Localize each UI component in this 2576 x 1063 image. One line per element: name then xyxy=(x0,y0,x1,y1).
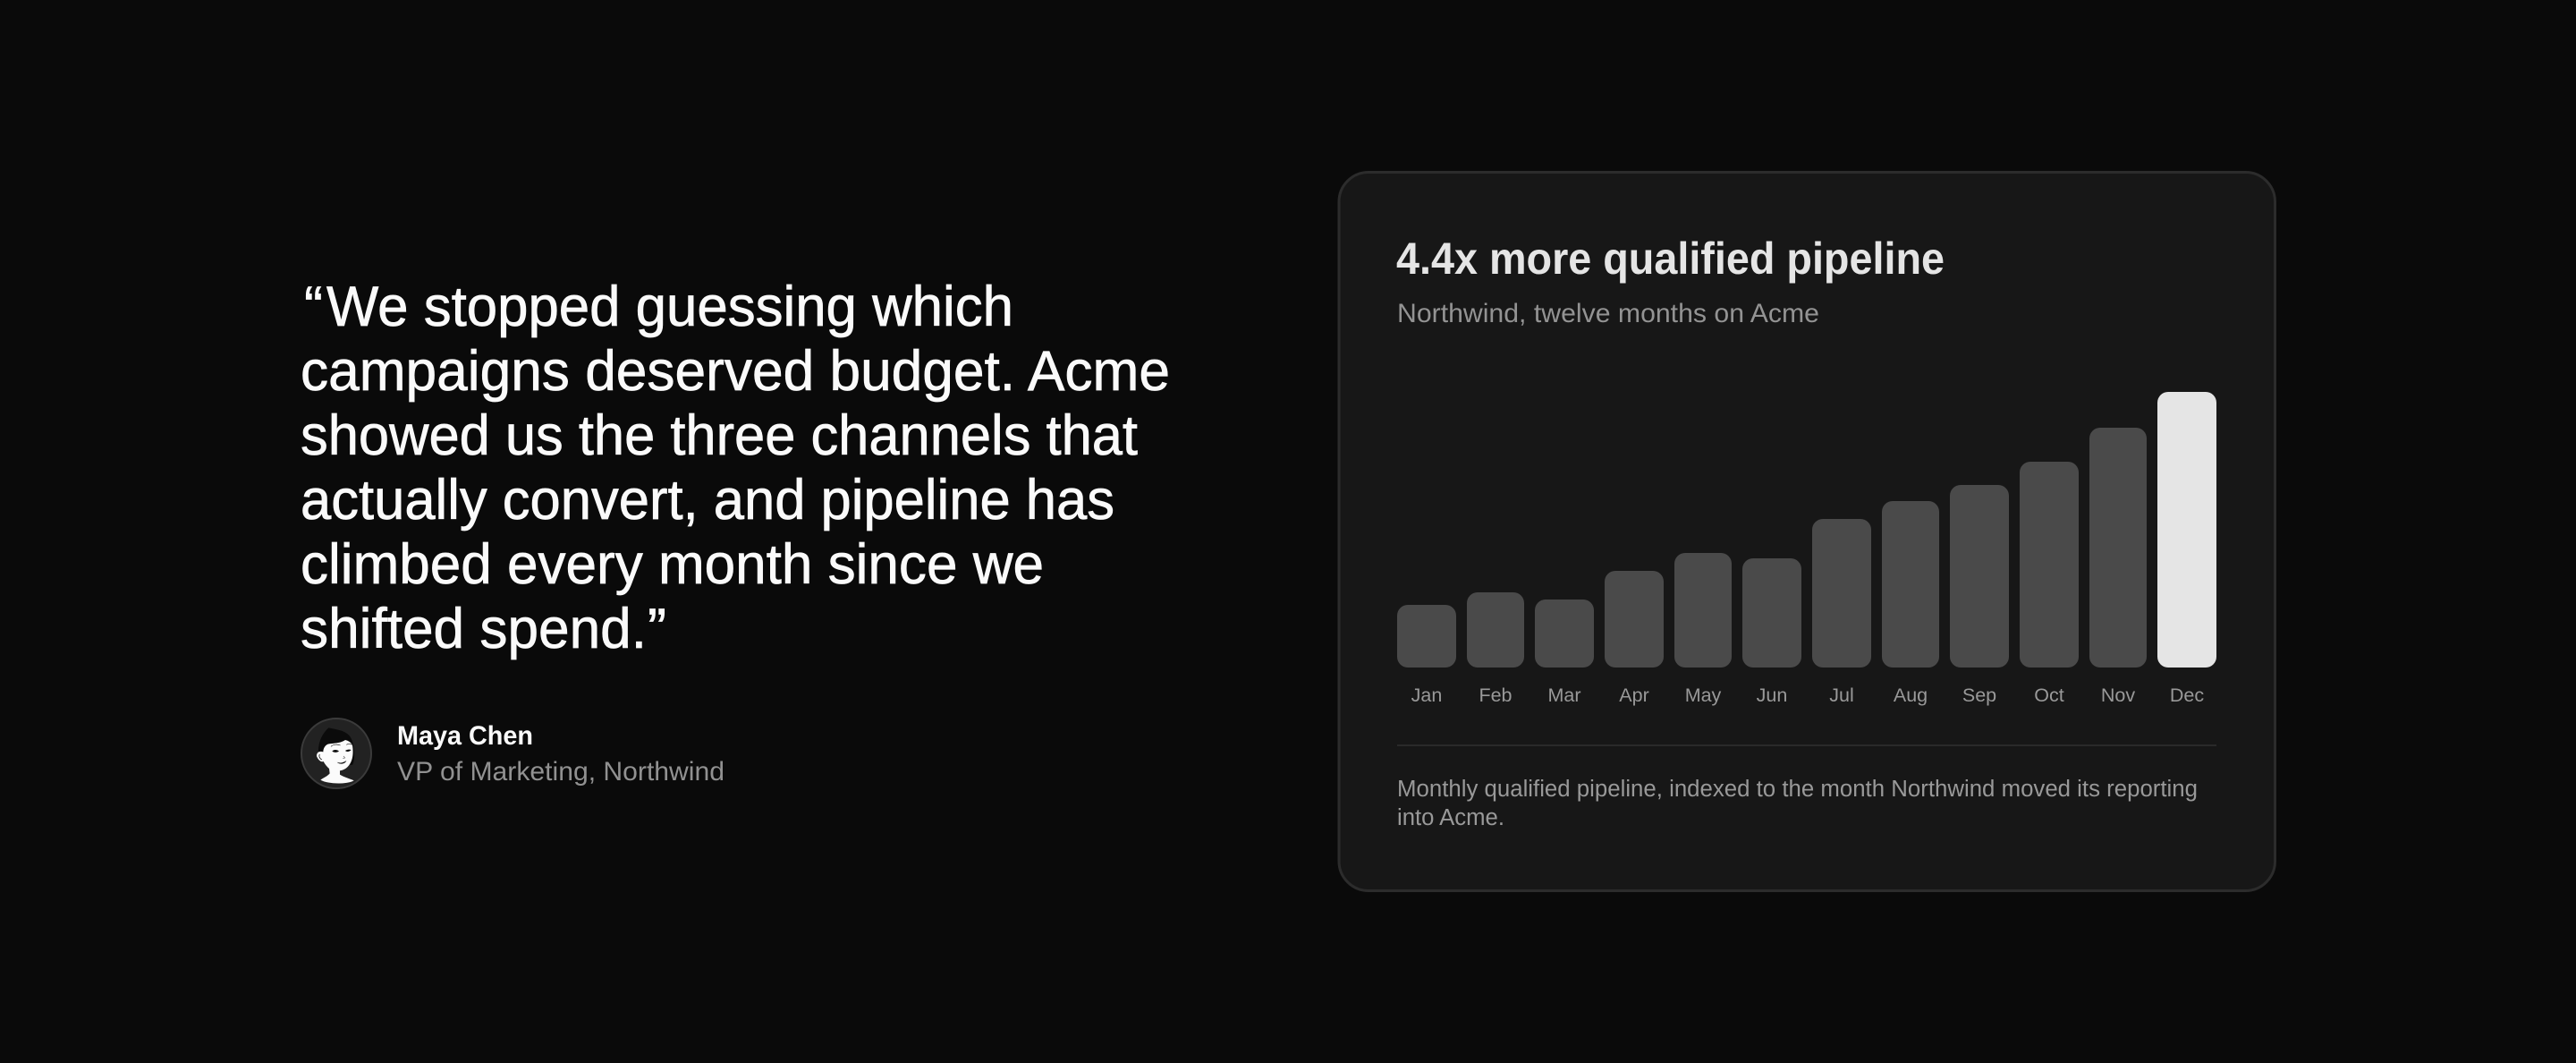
panel: pipeline chart card xyxy=(1339,172,2275,891)
icon: avatar portrait xyxy=(301,719,371,788)
bar chart xyxy=(1397,392,2216,706)
pull quote: climbed every month since we xyxy=(301,533,1044,596)
chart caption: into Acme. xyxy=(1397,805,1504,830)
month labels: Sep xyxy=(1962,685,1996,706)
chart caption xyxy=(1397,777,2198,830)
month labels: Jun xyxy=(1757,685,1787,706)
pull quote: shifted spend. xyxy=(301,598,647,660)
month labels: Nov xyxy=(2101,685,2135,706)
month labels: May xyxy=(1685,685,1722,706)
author attribution xyxy=(301,719,724,788)
month labels: Jan xyxy=(1411,685,1442,706)
bars xyxy=(1397,392,2216,668)
month labels: Mar xyxy=(1547,685,1581,706)
chart caption: Monthly qualified pipeline, indexed to the month Northwind moved its reporting xyxy=(1397,777,2198,802)
month labels: Aug xyxy=(1894,685,1928,706)
pull quote xyxy=(301,276,1170,660)
pull quote: “ xyxy=(304,276,323,338)
author role: VP of Marketing, Northwind xyxy=(397,757,724,787)
card heading: 4.4x more qualified pipeline xyxy=(1396,233,1945,284)
author name: Maya Chen xyxy=(397,721,533,751)
month labels: Jul xyxy=(1829,685,1854,706)
pull quote: showed us the three channels that xyxy=(301,404,1138,467)
pull quote: ” xyxy=(648,598,666,660)
card subtitle: Northwind, twelve months on Acme xyxy=(1397,299,1819,328)
month labels xyxy=(1411,685,2204,706)
pull quote: We stopped guessing which xyxy=(326,276,1013,338)
pull quote: actually convert, and pipeline has xyxy=(301,469,1114,532)
month labels: Apr xyxy=(1619,685,1649,706)
pull quote: campaigns deserved budget. Acme xyxy=(301,340,1170,403)
month labels: Feb xyxy=(1479,685,1513,706)
month labels: Oct xyxy=(2034,685,2064,706)
month labels: Dec xyxy=(2170,685,2204,706)
